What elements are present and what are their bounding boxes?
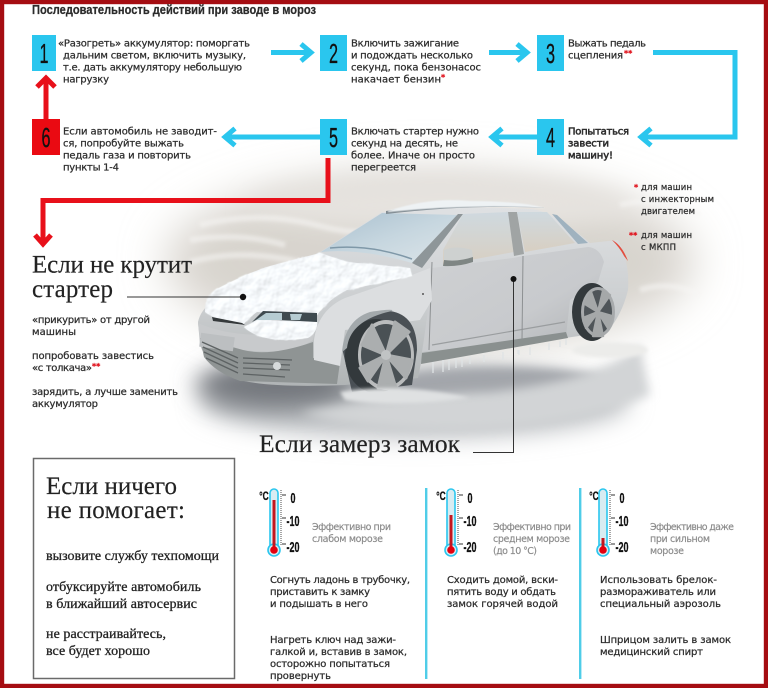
arrow: 1 to 2 (271, 44, 311, 61)
panel: if nothing helps: не помогает: (47, 497, 185, 524)
column: weak frost: слабом морозе (312, 534, 383, 545)
illustration: frozen car on snow (165, 172, 700, 438)
section: starter does not crank (32, 252, 246, 410)
step 1: 1 (39, 37, 49, 69)
section: starter does not crank: «прикурить» от другой (32, 315, 150, 326)
column: strong frost (589, 489, 734, 658)
section: starter does not crank: «с толкача» (32, 363, 92, 374)
step 2: 2 (329, 37, 338, 69)
footnotes: с МКПП (641, 243, 676, 253)
thermometer: weak frost: 0 (290, 490, 296, 507)
step 3: ** (624, 49, 633, 58)
bumper (198, 320, 317, 352)
column: medium frost: замок горячей водой (447, 599, 558, 610)
section: starter does not crank: зарядить, а лучше заменить (32, 387, 178, 398)
step 5 (320, 119, 479, 174)
column: weak frost: приставить к замку (270, 587, 370, 598)
column: weak frost: Эффективно при (312, 522, 391, 533)
arrow: 5 to 6 (225, 128, 320, 146)
column: weak frost: Нагреть ключ над зажи- (270, 635, 396, 646)
wheels (340, 283, 615, 404)
column: weak frost: Согнуть ладонь в трубочку, (270, 575, 410, 586)
step 2: и подождать несколько (351, 50, 473, 62)
column: medium frost: Эффективно при (493, 522, 571, 533)
thermometer: medium frost: -10 (463, 513, 477, 530)
panel: if nothing helps: в ближайший автосервис (46, 597, 197, 612)
arrow: 3 to 4 (641, 52, 735, 146)
column: medium frost: пятить воду и обдать (447, 587, 556, 598)
step 1: дальним светом, включить музыку, (63, 50, 246, 62)
column: medium frost: (до 10 °C) (493, 546, 537, 557)
step 2: секунд, пока бензонасос (351, 62, 481, 74)
section: starter does not crank: стартер (32, 276, 113, 303)
arrow: 5 down to starter section (35, 158, 328, 244)
column: strong frost: при сильном (650, 534, 710, 545)
column: weak frost (259, 489, 410, 682)
step 1: «Разогреть» аккумулятор: поморгать (58, 38, 250, 50)
thermometer: strong frost: 0 (619, 490, 625, 507)
step 6: пункты 1-4 (63, 162, 119, 174)
column: medium frost: Сходить домой, вски- (447, 575, 558, 586)
step 6: 6 (41, 121, 51, 153)
step 6: ся, попробуйте выжать (63, 138, 184, 150)
column: weak frost: провернуть (270, 671, 331, 682)
step 5: перегреется (351, 162, 416, 174)
divider (425, 488, 427, 679)
footnotes: для машин (641, 183, 692, 193)
arrow: 2 to 3 (489, 44, 527, 61)
windows (321, 204, 628, 295)
column: medium frost: среднем морозе (493, 534, 570, 545)
thermometer: weak frost: -10 (286, 513, 300, 530)
step 4 (537, 119, 629, 162)
step 2: Включить зажигание (351, 38, 459, 50)
column: strong frost: морозе (650, 546, 684, 557)
thermometer: medium frost (436, 489, 477, 556)
footnotes: ** (629, 231, 638, 240)
step 4: завести (568, 138, 609, 150)
column: strong frost: медицинский спирт (600, 647, 703, 658)
step 5: Включать стартер нужно (351, 126, 479, 138)
step 1: нагрузку (63, 74, 109, 86)
thermometer: medium frost: °C (436, 491, 446, 503)
thermometer: medium frost: -20 (463, 539, 477, 556)
step 5: более. Иначе он просто (351, 150, 475, 162)
column: weak frost: галкой и, вставив в замок, (270, 647, 407, 658)
arrow: 6 to 1 (37, 78, 55, 119)
step 6 (32, 119, 217, 174)
section: starter does not crank: попробовать завестись (32, 351, 154, 362)
thermometer: strong frost: -20 (615, 539, 629, 556)
column: strong frost: специальный аэрозоль (600, 599, 721, 610)
thermometer: strong frost (589, 489, 629, 556)
section: frozen lock heading (259, 276, 516, 458)
icicles (433, 339, 566, 373)
column: weak frost: и подышать в него (270, 599, 368, 610)
arrow: 4 to 5 (492, 128, 537, 146)
thermometer: strong frost: °C (589, 491, 599, 503)
step 3: 3 (546, 37, 555, 69)
footnotes: двигателем (641, 207, 695, 217)
step 2 (320, 35, 481, 86)
step 4: 4 (546, 121, 555, 153)
panel: if nothing helps: отбуксируйте автомобиль (46, 580, 201, 595)
column: strong frost: Использовать брелок- (600, 575, 717, 586)
panel: if nothing helps: не расстраивайтесь, (46, 627, 166, 642)
section: starter does not crank: машины (32, 327, 76, 338)
step 1: т.е. дать аккумулятору небольшую (63, 62, 242, 74)
step 3: сцепления (568, 50, 623, 62)
step 1 (32, 35, 250, 86)
footnotes: для машин (641, 231, 692, 241)
step 2: * (441, 73, 446, 82)
footnotes: с инжекторным (641, 195, 714, 205)
panel: if nothing helps: все будет хорошо (46, 644, 150, 659)
snow on hood (205, 200, 545, 340)
thermometer: weak frost (259, 489, 300, 556)
section: starter does not crank: Если не крутит (32, 252, 192, 278)
car body (198, 208, 628, 386)
column: strong frost: Шприцом залить в замок (600, 635, 731, 646)
thermometer: weak frost: °C (259, 491, 269, 503)
section: starter does not crank: аккумулятор (32, 399, 98, 410)
thermometer: strong frost: -10 (615, 513, 629, 530)
thermometer: medium frost: 0 (467, 490, 473, 507)
step 3 (537, 35, 646, 71)
step 6: педаль газа и повторить (63, 150, 191, 162)
step 4: Попытаться (568, 126, 629, 138)
panel: if nothing helps: Если ничего (46, 473, 177, 500)
step 6: Если автомобиль не заводит- (63, 126, 217, 138)
column: strong frost: размораживатель или (600, 587, 716, 598)
column: weak frost: осторожно попытаться (270, 659, 390, 670)
column: medium frost (436, 489, 571, 610)
divider (579, 488, 581, 679)
panel: if nothing helps: вызовите службу техпомощи (46, 549, 220, 564)
step 4: машину! (568, 150, 613, 162)
title: Последовательность действий при заводе в мороз (32, 2, 316, 17)
step 5: 5 (329, 121, 338, 153)
step 2: накачает бензин (351, 74, 441, 86)
section: starter does not crank: ** (92, 362, 101, 371)
thermometer: weak frost: -20 (286, 539, 300, 556)
step 3: Выжать педаль (568, 38, 646, 50)
section: frozen lock heading: Если замерз замок (259, 429, 461, 458)
panel: if nothing helps (34, 458, 234, 678)
step 5: секунд на десять, не (351, 138, 458, 150)
snow background (165, 172, 700, 438)
footnotes: * (634, 183, 639, 192)
column: strong frost: Эффективно даже (650, 522, 734, 533)
footnotes (629, 183, 714, 253)
